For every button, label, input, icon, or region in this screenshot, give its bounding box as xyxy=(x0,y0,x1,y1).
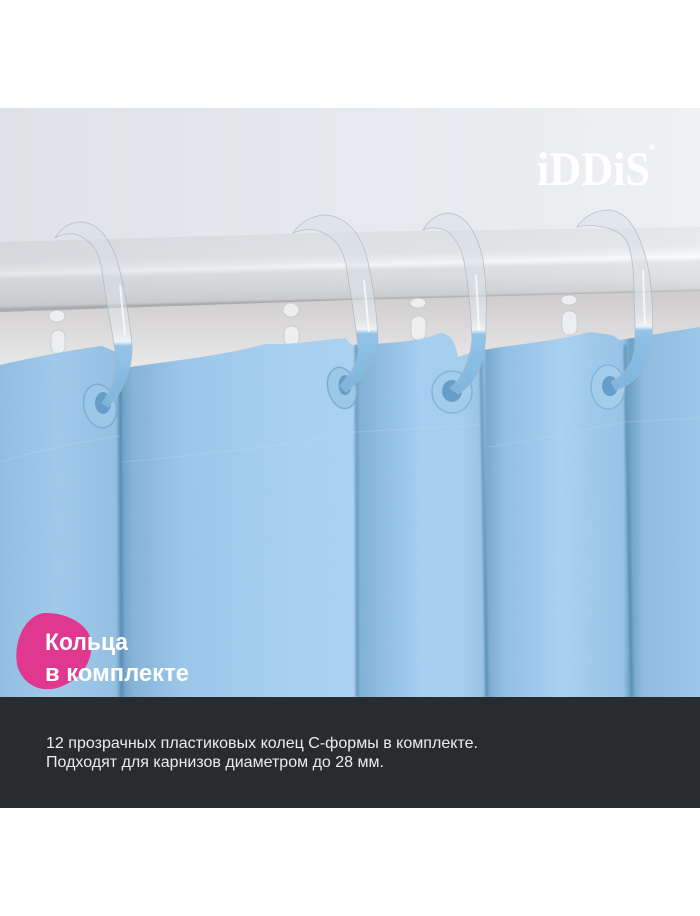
curtain rod xyxy=(0,227,700,312)
curtain hem stitching xyxy=(0,418,700,462)
heading: rings included: в комплекте xyxy=(45,660,189,687)
rod shading xyxy=(0,227,700,312)
brand logo: iDDiS xyxy=(537,143,650,196)
description text: 12 прозрачных пластиковых колец С-формы в комплекте. xyxy=(46,735,478,752)
blue curtain xyxy=(0,327,700,697)
ring clips behind the rod xyxy=(49,295,577,354)
recess beneath the rod xyxy=(0,280,700,380)
description text: Подходят для карнизов диаметром до 28 мм. xyxy=(46,754,384,771)
heading: rings included xyxy=(45,629,189,687)
wall backdrop xyxy=(0,108,700,243)
ring 4 xyxy=(577,210,653,409)
dark description band xyxy=(0,697,700,808)
ring 3 xyxy=(423,213,486,413)
pink blob badge xyxy=(16,613,91,689)
heading: rings included: Кольца xyxy=(45,629,129,656)
ring 2 xyxy=(293,215,378,412)
description text xyxy=(46,735,478,771)
registered mark xyxy=(649,144,655,150)
ring 1 xyxy=(55,222,132,431)
fold shadow lines xyxy=(120,345,632,697)
